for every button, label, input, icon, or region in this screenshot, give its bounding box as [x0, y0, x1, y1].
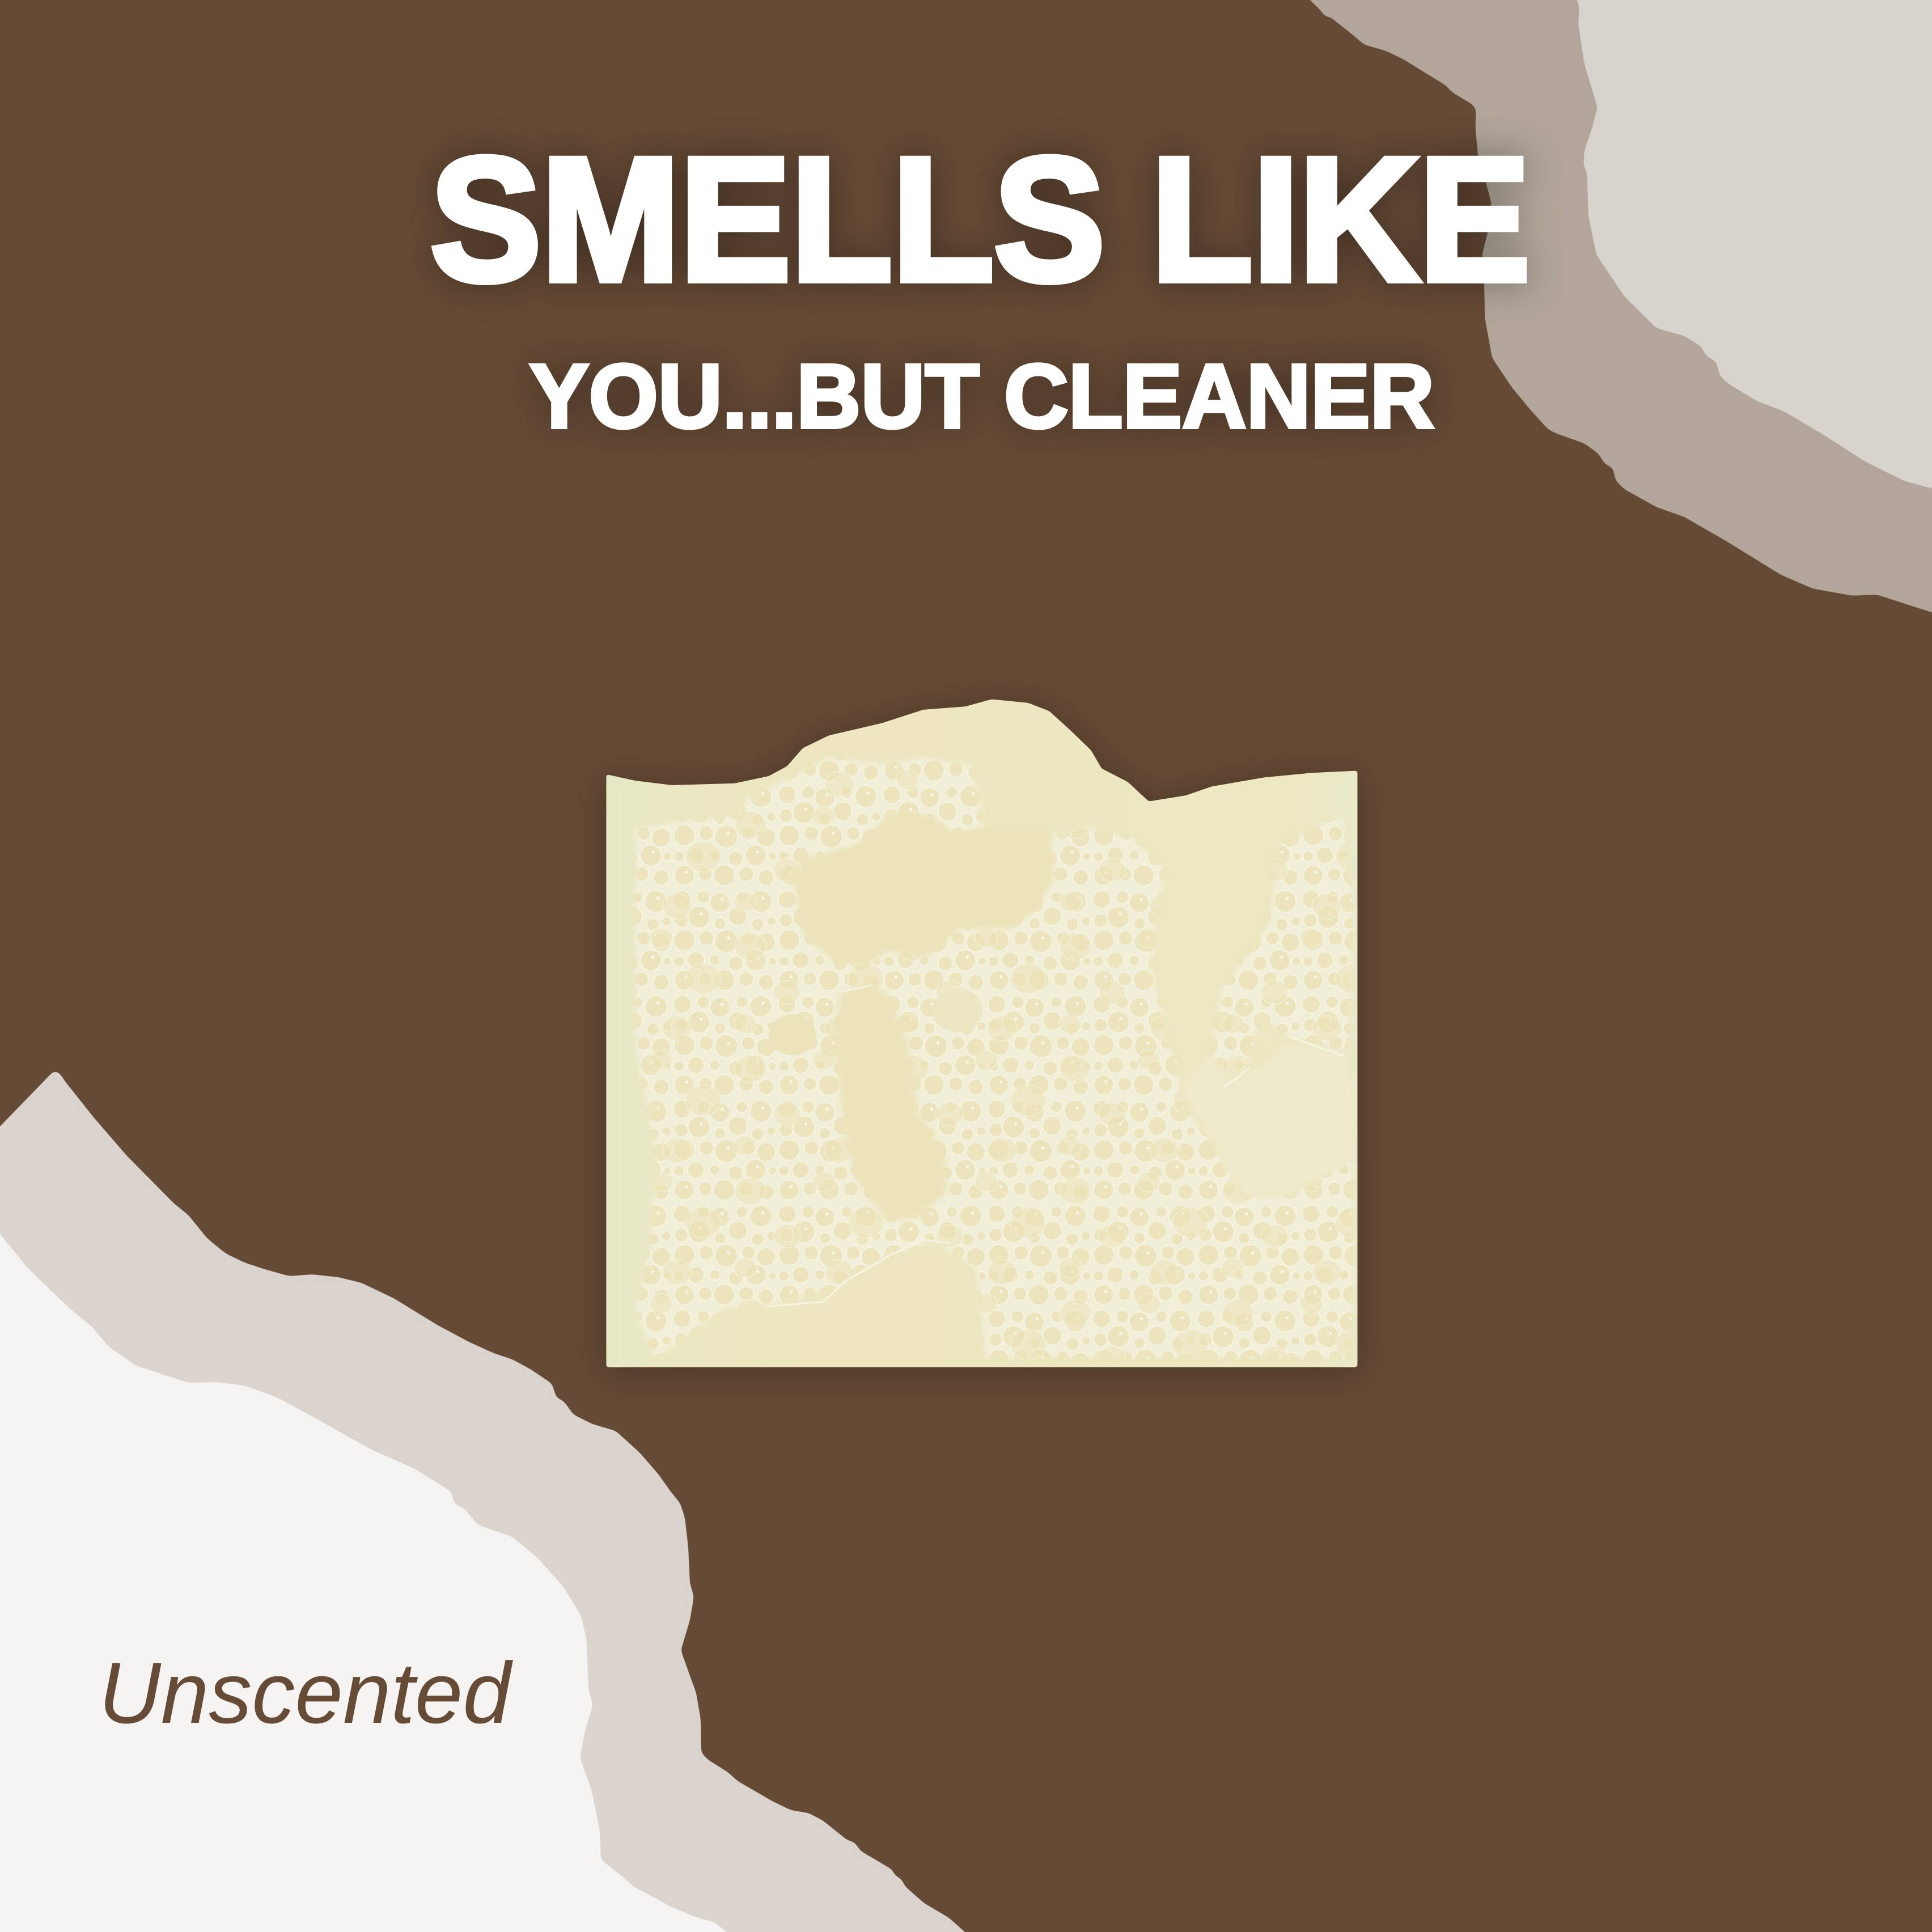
soap smooth patch: left foam gap — [769, 1015, 816, 1056]
soap foam: bubbles — [633, 756, 1358, 1360]
subtitle: YOU...BUT CLEANER — [529, 345, 1434, 447]
soap body — [606, 699, 1357, 1367]
soap smooth pool: upper centre — [793, 811, 1054, 965]
soap bar — [597, 696, 1367, 1381]
torn paper: top-right light layer — [1572, 0, 1932, 501]
scent label: Unscented — [99, 1645, 514, 1742]
soap lower-right smooth patch — [1180, 1042, 1353, 1196]
soap smooth patch: centre foam gap — [933, 989, 982, 1032]
title: SMELLS LIKE — [430, 121, 1530, 317]
soap surface streaks — [769, 985, 1343, 1306]
torn paper: bottom-left off-white layer — [0, 1196, 771, 1932]
torn paper: top-right taupe layer — [1288, 0, 1932, 630]
soap smooth pool: centre — [834, 985, 947, 1221]
torn paper: bottom-left beige layer — [0, 1071, 1009, 1932]
